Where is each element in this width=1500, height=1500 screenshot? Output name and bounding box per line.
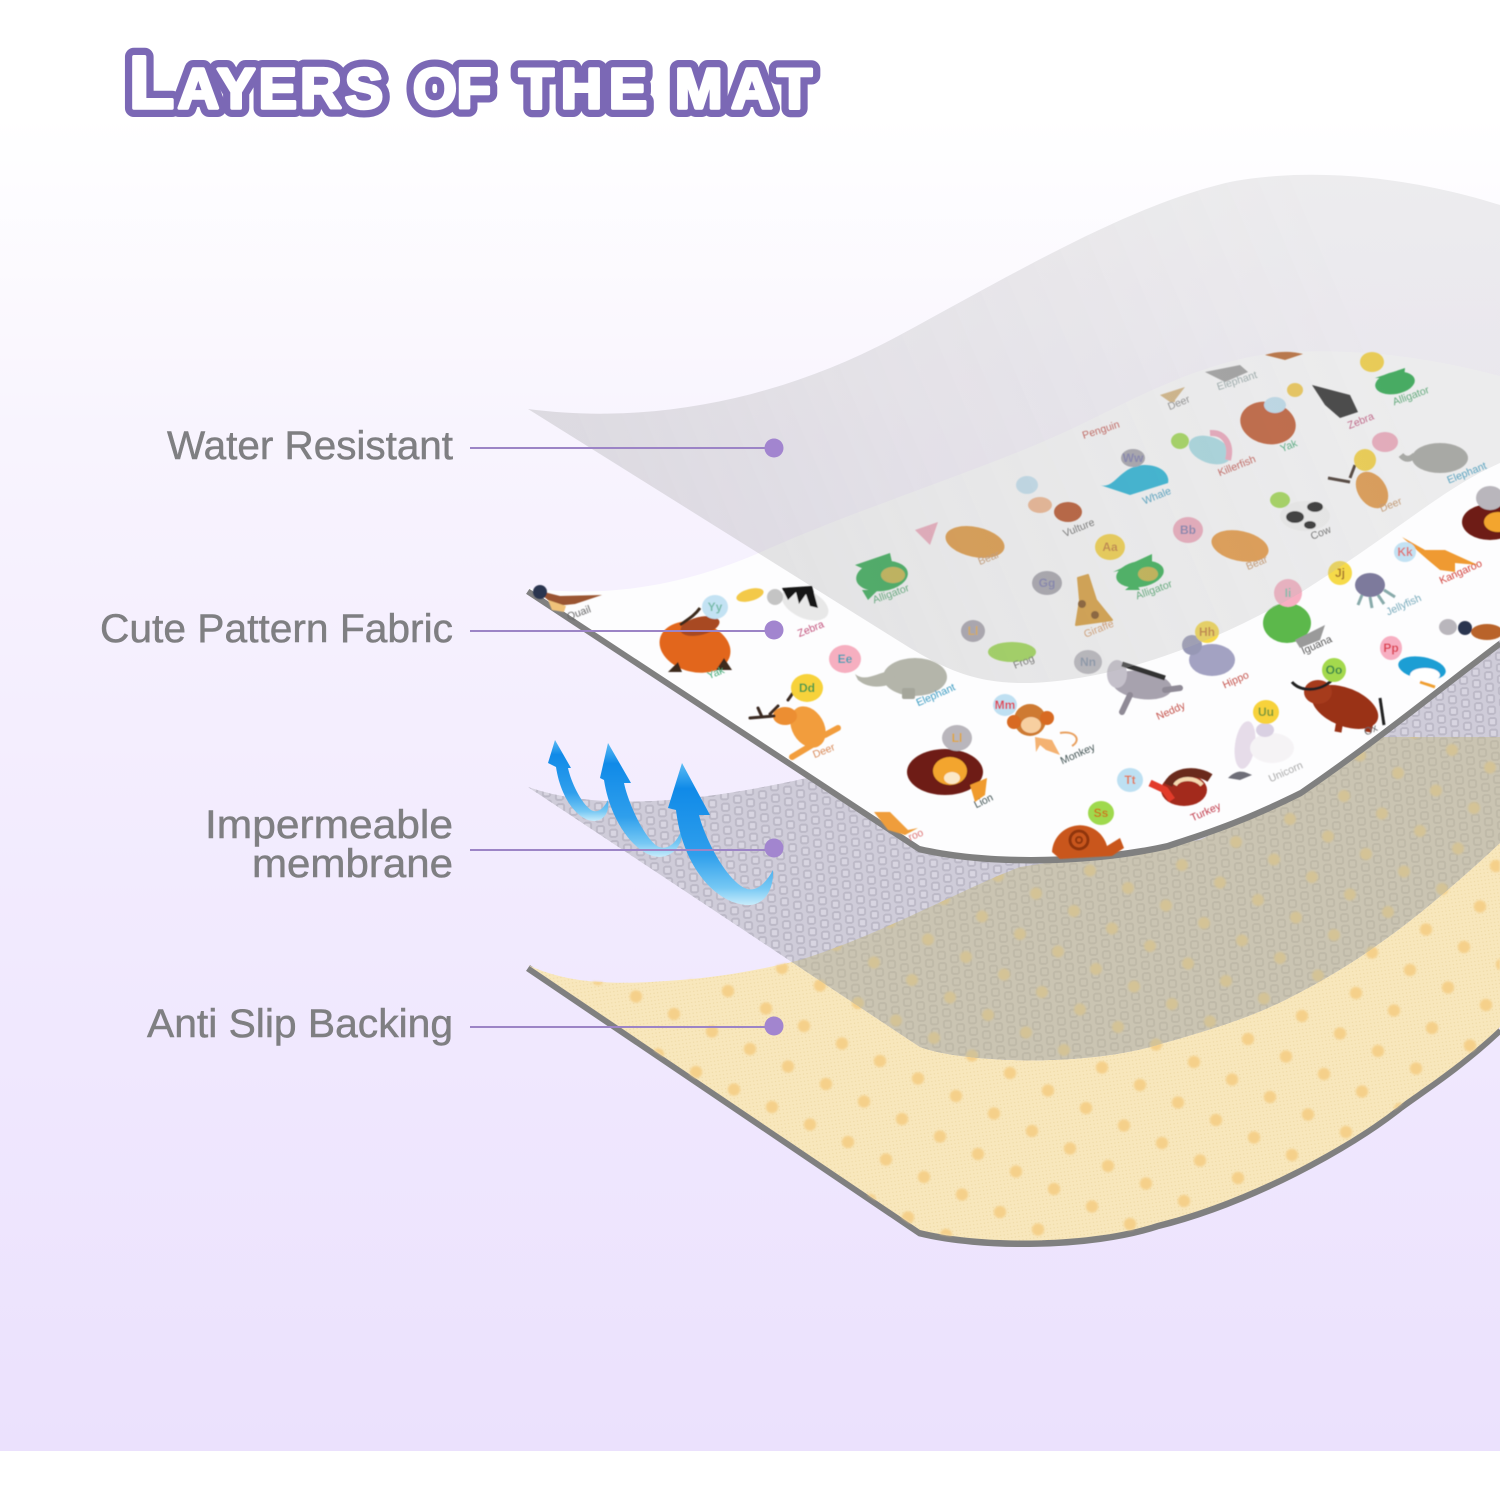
animal: frog: Frog bbox=[1012, 653, 1036, 672]
animal: cow: Cow bbox=[1309, 524, 1333, 543]
layer: impermeable membrane bbox=[528, 640, 1500, 1100]
arrow: vapour 1 bbox=[548, 740, 608, 821]
animal: turkey: Turkey bbox=[1189, 800, 1223, 824]
animal: penguin: Pp bbox=[1383, 641, 1399, 655]
animal: quail bbox=[533, 585, 602, 623]
title: OF bbox=[413, 57, 491, 121]
animal: ox: Oo bbox=[1326, 663, 1342, 677]
animal: lion bbox=[907, 725, 995, 811]
animal: deer 2: Deer bbox=[1378, 495, 1404, 515]
animal: monkey bbox=[993, 694, 1098, 767]
title bbox=[129, 41, 812, 124]
animal: hippo bbox=[1182, 621, 1251, 691]
animal: elephant partial bbox=[1205, 365, 1259, 393]
label: penguin: Penguin bbox=[1081, 418, 1121, 442]
animal: unicorn bbox=[1228, 700, 1305, 785]
animal: giraffe: Gg bbox=[1039, 576, 1055, 590]
animal: giraffe: Giraffe bbox=[1082, 618, 1116, 641]
animal: eel top bbox=[1265, 352, 1303, 360]
animal: snail bbox=[1052, 801, 1124, 859]
animal: hippo: Hippo bbox=[1221, 669, 1251, 691]
animal: bear 2: Bear bbox=[1244, 553, 1270, 573]
animal: frog bbox=[961, 620, 1036, 672]
callout: impermeable membrane: Impermeable bbox=[205, 803, 453, 847]
animal: turkey: Tt bbox=[1124, 773, 1136, 787]
animal: alligator bbox=[854, 553, 911, 606]
callout: water resistant: Water Resistant bbox=[167, 424, 453, 468]
title: OF bbox=[413, 57, 491, 121]
animal: quail right bbox=[1439, 619, 1500, 640]
animal: monkey: Monkey bbox=[1059, 741, 1098, 767]
title: THE bbox=[519, 57, 647, 121]
animal: jellyfish bbox=[1328, 561, 1423, 618]
animal: cow bbox=[1270, 492, 1333, 543]
animal: unicorn: Unicorn bbox=[1267, 759, 1305, 785]
layer: cute pattern fabric bbox=[528, 351, 1500, 860]
animal: iguana: Ii bbox=[1285, 586, 1291, 600]
animal: iguana: Iguana bbox=[1300, 633, 1334, 657]
title: LAYERS bbox=[129, 41, 383, 124]
animal: lion right bbox=[1462, 486, 1500, 540]
layer: anti slip backing bbox=[528, 737, 1500, 1243]
callout: cute pattern fabric: Cute Pattern Fabric bbox=[100, 607, 453, 651]
animal: alligator 2 bbox=[1095, 534, 1174, 602]
animal: zebra: Zebra bbox=[796, 618, 826, 640]
animal: monkey: Mm bbox=[995, 698, 1015, 712]
arrow: vapour 2 bbox=[600, 743, 682, 857]
animal: elephant partial: Elephant bbox=[1216, 369, 1259, 393]
animal: ox: Ox bbox=[1362, 722, 1380, 738]
animal: elephant bbox=[829, 645, 957, 709]
animal: neddy: Nn bbox=[1080, 655, 1096, 669]
animal: turkey bbox=[1117, 768, 1223, 824]
callout: water resistant bbox=[167, 424, 784, 468]
title: MAT bbox=[675, 57, 812, 121]
animal: deer: Deer bbox=[811, 741, 837, 761]
animal: deer bbox=[750, 674, 838, 761]
animal: yak bbox=[654, 595, 736, 682]
animal: jellyfish: Jj bbox=[1335, 566, 1345, 580]
animal: kangaroo partial bbox=[874, 812, 925, 844]
animal: deer 2 bbox=[1328, 449, 1404, 515]
animal: elephant 2: Elephant bbox=[1445, 460, 1488, 487]
animal: hippo: Hh bbox=[1199, 625, 1215, 639]
callout: anti slip backing: Anti Slip Backing bbox=[147, 1002, 453, 1046]
animal: alligator 3 bbox=[1360, 352, 1431, 408]
animal: yak: Yy bbox=[708, 600, 723, 614]
animal: lion: Ll bbox=[952, 731, 962, 745]
title: LAYERS bbox=[129, 41, 383, 124]
animal: alligator: Alligator bbox=[871, 582, 911, 606]
animal: alligator 2: Aa bbox=[1102, 540, 1118, 554]
animal: vulture bbox=[1016, 476, 1097, 540]
animal: kangaroo: Kk bbox=[1397, 545, 1413, 559]
animal: zebra 2: Zebra bbox=[1346, 410, 1376, 432]
animal: bear 2: Bb bbox=[1180, 523, 1196, 537]
title: THE bbox=[519, 57, 647, 121]
animal: ox bbox=[1292, 658, 1385, 738]
callout: cute pattern fabric bbox=[100, 607, 784, 651]
animal: kangaroo partial: roo bbox=[907, 827, 925, 844]
animal: jellyfish: Jellyfish bbox=[1384, 592, 1423, 618]
animal: kangaroo bbox=[1394, 537, 1484, 587]
animal: bear bbox=[915, 521, 1007, 568]
animal: zebra bbox=[735, 581, 834, 640]
animal: killerfish bbox=[1171, 430, 1258, 479]
title: MAT bbox=[675, 57, 812, 121]
animal: alligator 2: Alligator bbox=[1134, 578, 1174, 602]
callout: anti slip backing bbox=[147, 1002, 784, 1046]
animal: neddy bbox=[1074, 650, 1188, 723]
callout: impermeable membrane: membrane bbox=[252, 842, 453, 886]
animal: zebra 2 bbox=[1287, 383, 1376, 432]
animal: yak: Yak bbox=[706, 664, 727, 682]
animal: deer legs bbox=[1160, 387, 1192, 413]
animal: unicorn: Uu bbox=[1258, 705, 1274, 719]
animal: yak 2 bbox=[1236, 397, 1300, 455]
animal: killerfish: Killerfish bbox=[1216, 453, 1258, 479]
animal: deer legs: Deer bbox=[1166, 393, 1192, 413]
callout: impermeable membrane bbox=[205, 803, 784, 886]
animal: bear 2 bbox=[1173, 517, 1271, 573]
animal: whale: Ww bbox=[1123, 451, 1144, 465]
animal: neddy: Neddy bbox=[1154, 699, 1188, 723]
animal: elephant: Elephant bbox=[914, 681, 957, 709]
animal: whale bbox=[1100, 449, 1173, 507]
animal: bear: Bear bbox=[976, 548, 1002, 568]
animal: yak 2: Yak bbox=[1279, 437, 1300, 455]
animal: vulture: Vulture bbox=[1061, 516, 1097, 540]
animal: kangaroo: Kangaroo bbox=[1438, 557, 1484, 587]
animal: snail: Ss bbox=[1094, 806, 1109, 820]
layer: water resistant film bbox=[528, 175, 1500, 683]
animal: alligator 3: Alligator bbox=[1391, 384, 1431, 408]
animal: elephant: Ee bbox=[838, 652, 853, 666]
animal: lion: Lion bbox=[972, 791, 995, 811]
animal: quail: Quail bbox=[565, 603, 593, 623]
animal: deer: Dd bbox=[799, 681, 815, 695]
animal: frog: Ll bbox=[968, 624, 978, 638]
animal: elephant 2 bbox=[1372, 432, 1488, 487]
arrow: vapour 3 bbox=[668, 763, 773, 905]
animal: giraffe bbox=[1032, 571, 1116, 641]
animal: iguana bbox=[1263, 579, 1334, 657]
animal: penguin bbox=[1380, 636, 1448, 687]
animal: whale: Whale bbox=[1141, 485, 1173, 507]
